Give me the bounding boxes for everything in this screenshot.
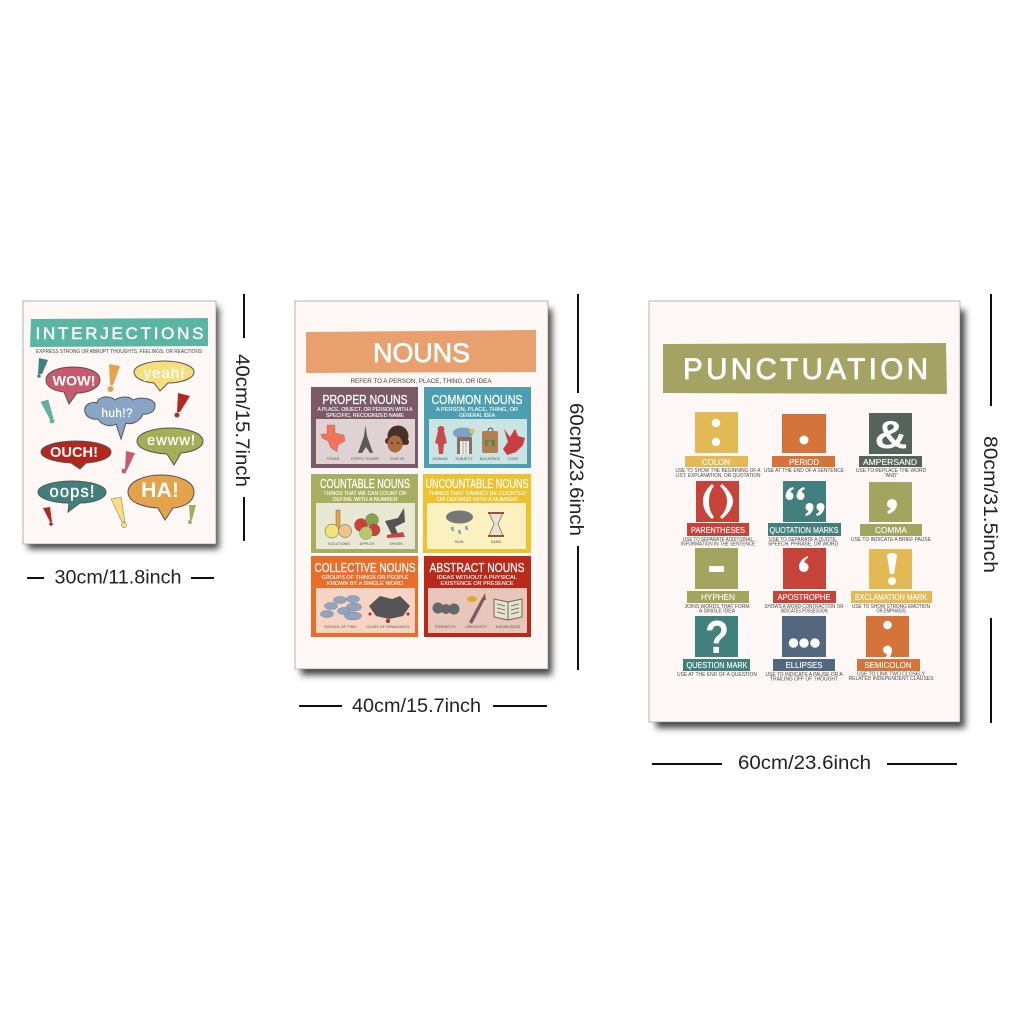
poster: nouns [295, 301, 552, 675]
card: ellipses: TRAILING OFF OF THOUGHT [770, 676, 838, 682]
icon: apples [354, 514, 380, 540]
panel: common nouns: GENERAL IDEA [459, 413, 495, 419]
card: colon: COLON [702, 457, 730, 467]
bubble: huh cloud [85, 397, 155, 439]
poster: interjections [23, 301, 219, 549]
card: question mark [677, 611, 757, 678]
subtitle: EXPRESS STRONG OR ABRUPT THOUGHTS, FEELINGS, OR REACTIONS [36, 349, 203, 355]
card: hyphen: A SINGLE IDEA [699, 608, 736, 614]
card: hyphen: HYPHEN [701, 592, 735, 602]
bubble: ewww: ewww! [147, 433, 195, 449]
card: semicolon: USE TO LINK TWO CLOSELY [857, 672, 926, 678]
panel: common nouns: A PERSON, PLACE, THING, OR [436, 407, 518, 413]
panel: proper nouns: SPECIFIC, RECOGNIZED NAME [326, 413, 404, 419]
card: quotation marks: SPEECH, PHRASE, OR WORD [768, 542, 838, 548]
panel: common nouns: LOVE [508, 457, 519, 461]
bubble: yeah: yeah! [144, 365, 184, 382]
bubble: oops: oops! [50, 483, 94, 501]
panel: abstract nouns: EXISTENCE OR PRESENCE [440, 581, 514, 587]
panel: countable nouns: COUNTABLE NOUNS [320, 477, 410, 491]
panel: proper nouns [311, 387, 418, 468]
dimension: interjections width: 30cm/11.8inch [54, 566, 182, 588]
icon: building and cloud [453, 428, 474, 454]
card: semicolon [848, 616, 934, 682]
panel: common nouns: BACKPACK [480, 457, 501, 461]
bubble: yeah [134, 361, 194, 391]
bubble: ouch [41, 441, 111, 469]
card: ampersand [856, 413, 926, 479]
icon: dumbbell [432, 602, 460, 614]
panel: countable nouns: THINGS THAT WE CAN COUNT OR [324, 491, 407, 497]
bubble: huh cloud: huh!? [102, 408, 132, 420]
card: ellipses: USE TO INDICATE A PAUSE OR A [766, 672, 843, 678]
panel: common nouns [424, 387, 531, 468]
icon: woman [435, 426, 447, 454]
panel: abstract nouns: STRENGTH [435, 625, 456, 629]
panel: uncountable nouns: OR DEFINED WITH A NUMBER [437, 497, 517, 503]
panel: proper nouns: TEXAS [327, 457, 340, 461]
card: parentheses: INFORMATION IN THE SENTENCE [681, 542, 756, 548]
poster: punctuation [649, 301, 965, 728]
subtitle: REFER TO A PERSON, PLACE, THING, OR IDEA [350, 378, 492, 385]
icon: hourglass [488, 512, 504, 537]
panel: uncountable nouns [423, 474, 531, 553]
bubble: wow: WOW! [52, 372, 96, 388]
title banner: punctuation: PUNCTUATION [683, 353, 928, 386]
panel: proper nouns: EIFFEL TOWER [351, 457, 379, 461]
icon: texas [321, 425, 345, 452]
icon: rain cloud [446, 510, 473, 534]
exclamation marks [37, 358, 196, 528]
card: question mark: QUESTION MARK [686, 660, 748, 670]
card: hyphen [684, 548, 750, 614]
panel: collective nouns: KNOWN BY A SINGLE WORD [327, 581, 403, 587]
icon: face [385, 426, 409, 452]
card: apostrophe: SHOWS A WORD CONTRACTION OR [764, 604, 844, 610]
card: comma: COMMA [875, 525, 907, 535]
card: semicolon: SEMICOLON [864, 660, 912, 670]
dimension: punctuation width: 60cm/23.6inch [738, 752, 871, 774]
card: exclamation mark [851, 549, 932, 614]
title banner: interjections [30, 318, 208, 347]
title banner: punctuation [663, 343, 947, 394]
bubble: ha: HA! [141, 479, 179, 502]
panel: uncountable nouns: RAIN [454, 540, 464, 544]
icon: flasks [325, 510, 352, 538]
card: colon [676, 412, 761, 479]
panel: abstract nouns: KNOWLEDGE [496, 625, 521, 629]
panel: uncountable nouns: THINGS THAT CANNOT BE COUNTED [428, 491, 526, 497]
panel: abstract nouns: IDEAS WITHOUT A PHYSICAL [437, 575, 517, 581]
panel: countable nouns: SHOES [389, 542, 403, 546]
card: apostrophe: APOSTROPHE [778, 592, 831, 602]
panel: proper nouns: A PLACE, OBJECT, OR PERSON WITH A [318, 407, 413, 413]
card: period: PERIOD [789, 457, 819, 467]
card: comma [851, 482, 932, 543]
card: parentheses [681, 481, 756, 548]
icon: eiffel tower [358, 425, 373, 453]
icon: paintbrush [467, 593, 486, 624]
card: colon: LIST, EXPLANATION, OR QUOTATION [676, 473, 761, 479]
bubble: wow [46, 367, 100, 404]
panel: uncountable nouns: SAND [491, 540, 502, 544]
card: semicolon: RELATED INDEPENDENT CLAUSES [848, 676, 934, 682]
panel: collective nouns: SCHOOL OF FISH [324, 625, 356, 629]
bubble: ha [128, 475, 194, 520]
card: parentheses: USE TO SEPARATE ADDITIONAL [683, 537, 753, 543]
panel: countable nouns: SOLUTIONS [328, 542, 350, 546]
card: period [764, 414, 845, 474]
icon: love [503, 429, 525, 455]
panel: collective nouns: GROUPS OF THINGS OR PEOPLE [322, 575, 409, 581]
title banner: nouns [306, 330, 536, 373]
panel: abstract nouns [424, 556, 531, 637]
card: question mark: USE AT THE END OF A QUESTION [677, 672, 757, 678]
card: apostrophe [764, 548, 844, 614]
icon: backpack [482, 428, 498, 453]
card: ellipses [766, 616, 843, 682]
card: question mark: ? [705, 611, 729, 663]
card: hyphen: JOINS WORDS THAT FORM [684, 604, 750, 610]
card: period: USE AT THE END OF A SENTENCE [764, 468, 845, 474]
panel: common nouns: WOMAN [433, 457, 448, 461]
dimension: nouns width: 40cm/15.7inch [352, 695, 481, 717]
panel: countable nouns [311, 474, 418, 553]
card: exclamation mark: USE TO SHOW STRONG EMOTION [852, 604, 930, 610]
icon: open book [494, 599, 522, 620]
bubble: ewww [137, 428, 203, 465]
panel: common nouns: SUBJECT [455, 457, 473, 461]
icon: graduates [368, 596, 410, 623]
card: colon: USE TO SHOW THE BEGINNING OF A [676, 468, 761, 474]
card: ampersand: AMPERSAND [863, 457, 917, 467]
card: comma: USE TO INDICATE A BRIEF PAUSE [851, 537, 932, 543]
dimension: punctuation height: 80cm/31.5inch [979, 436, 1001, 573]
panel: collective nouns: COLLECTIVE NOUNS [314, 561, 416, 575]
icon: fish [320, 596, 362, 620]
bubble: oops [38, 481, 106, 512]
panel: abstract nouns: CREATIVITY [465, 625, 488, 629]
panel: collective nouns [311, 556, 418, 637]
panel: abstract nouns: ABSTRACT NOUNS [430, 561, 524, 575]
card: ampersand: & [874, 414, 908, 457]
card: ampersand: "AND" [884, 473, 898, 479]
dimension: nouns height: 60cm/23.6inch [565, 403, 587, 536]
panel: uncountable nouns: UNCOUNTABLE NOUNS [426, 477, 528, 491]
card: parentheses: PARENTHESES [691, 525, 745, 535]
card: quotation marks [768, 481, 841, 548]
panel: proper nouns: PROPER NOUNS [322, 393, 408, 407]
card: apostrophe: INDICATES POSSESSION [780, 608, 828, 614]
bubble: ouch: OUCH! [50, 444, 98, 461]
card: exclamation mark: EXCLAMATION MARK [855, 592, 927, 602]
title banner: interjections: INTERJECTIONS [36, 324, 204, 343]
dimension: interjections height: 40cm/15.7inch [231, 354, 253, 487]
card: ampersand: USE TO REPLACE THE WORD [856, 468, 926, 474]
card: ellipses: ELLIPSES [786, 660, 823, 670]
card: quotation marks: USE TO SEPARATE A QUOTE, [769, 537, 837, 543]
icon: shoes [385, 508, 405, 538]
panel: proper nouns: JOSLYN [390, 457, 404, 461]
panel: collective nouns: CLASS OF GRADUATES [366, 625, 410, 629]
title banner: nouns: NOUNS [373, 338, 470, 368]
card: exclamation mark: OR EMPHASIS [876, 608, 906, 614]
panel: common nouns: COMMON NOUNS [432, 393, 522, 407]
panel: countable nouns: APPLES [360, 542, 375, 546]
panel: countable nouns: DEFINE WITH A NUMBER [332, 497, 398, 503]
card: quotation marks: QUOTATION MARKS [770, 525, 839, 535]
